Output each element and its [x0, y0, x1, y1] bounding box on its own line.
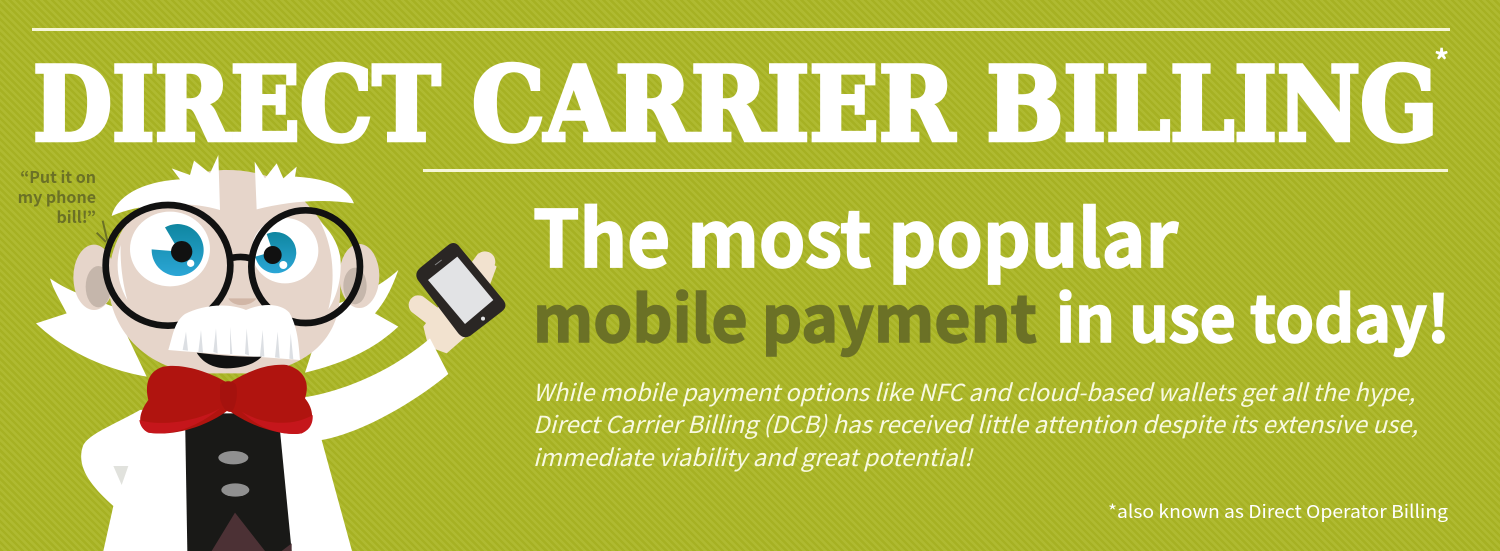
intro paragraph: [533, 374, 1418, 473]
intro paragraph: immediate viability and great potential!: [533, 439, 974, 473]
footnote: *also known as Direct Operator Billing: [1108, 498, 1448, 524]
speech quote: “Put it on: [20, 164, 96, 188]
coat lapel mark: [113, 466, 128, 485]
hand: [418, 251, 497, 353]
ears: [73, 245, 115, 310]
speech quote: my phone: [18, 184, 96, 208]
title: *: [1434, 37, 1449, 81]
heading: mobile payment in use today: [533, 269, 1450, 361]
character: professor holding phone: [36, 155, 505, 551]
mouth: [197, 353, 262, 368]
head: [108, 170, 340, 373]
bow tie: [140, 365, 312, 434]
irises: [152, 224, 204, 276]
speech tick marks: [97, 221, 107, 242]
intro paragraph: Direct Carrier Billing (DCB) has received little attention despite its extensive use,: [533, 406, 1418, 440]
lab coat and raised arm: [81, 338, 448, 551]
moustache: [168, 305, 300, 360]
pupils: [171, 241, 192, 262]
speech quote: bill!”: [56, 204, 96, 228]
heading: mobile payment in use today: mobile payment: [533, 269, 1037, 361]
heading: the most popular: The most popular: [533, 178, 1179, 290]
eye whites: [130, 212, 210, 286]
vest buttons: [218, 451, 248, 464]
shirt tie: [212, 513, 292, 551]
speech quote: [18, 164, 96, 228]
nose: [228, 298, 257, 305]
lens glare: [320, 222, 341, 309]
hair tufts: [112, 155, 220, 216]
phone: [416, 243, 505, 337]
side hair: [36, 278, 147, 377]
heading: mobile payment in use today: in use today!: [1056, 269, 1450, 361]
glasses: [106, 205, 360, 326]
moustache strands: [183, 327, 293, 359]
intro paragraph: While mobile payment options like NFC and cloud-based wallets get all the hype,: [533, 374, 1415, 408]
vest: [185, 413, 292, 551]
